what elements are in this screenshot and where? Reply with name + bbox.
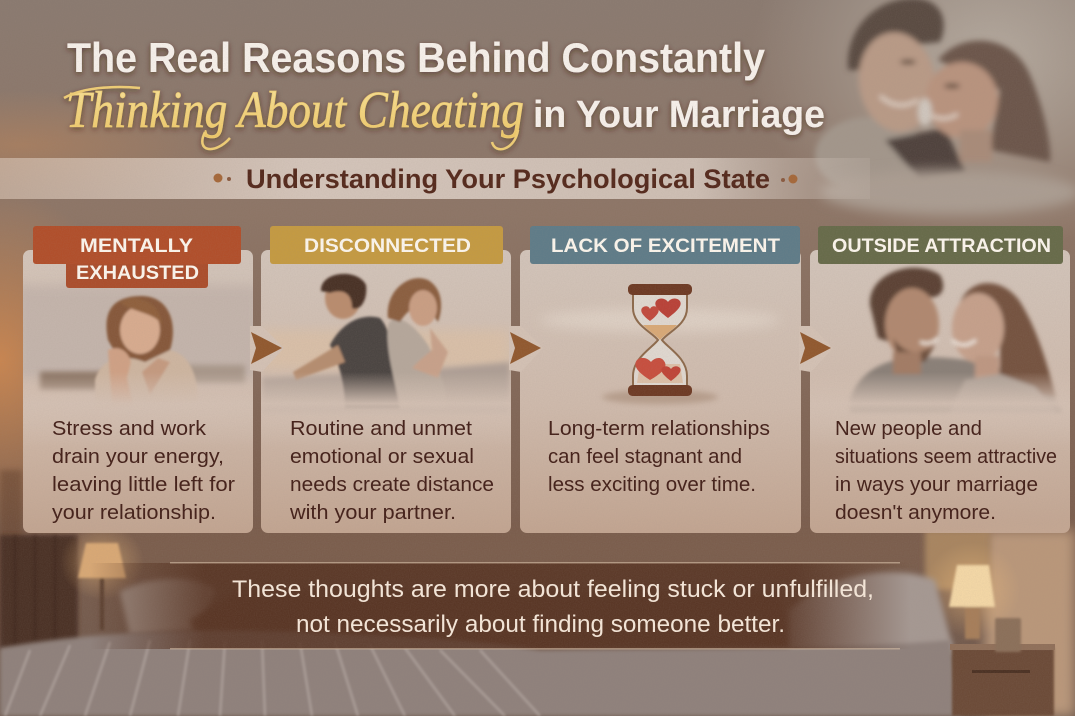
panel: outside attraction [810, 226, 1070, 533]
title highlight: script line: Thinking About Cheating [66, 82, 524, 139]
title: The Real Reasons Behind Constantly [67, 34, 766, 81]
text: card 4: situations seem attractive [835, 445, 1057, 468]
label tab: lack of excitement [530, 226, 800, 264]
label tab: lack of excitement: LACK OF EXCITEMENT [551, 236, 780, 257]
text: card 2: needs create distance [290, 473, 494, 496]
icon: right bedside lamp [949, 565, 1021, 652]
decoration: script flourishes [64, 87, 518, 149]
photo fade [261, 372, 511, 447]
text: card 2: with your partner. [289, 501, 456, 524]
label tab: disconnected: DISCONNECTED [304, 236, 471, 257]
icon: hourglass with hearts [602, 284, 718, 404]
text: card 1: your relationship. [52, 501, 216, 524]
label tab: disconnected [270, 226, 503, 264]
text: card 1: Stress and work [52, 417, 207, 440]
arrow: panel 1 to 2 [250, 326, 284, 372]
text: card 3: less exciting over time. [548, 473, 756, 496]
title [64, 34, 825, 149]
text: card 2: Routine and unmet [290, 417, 472, 440]
decoration: subtitle right bullets [781, 174, 798, 184]
panel: mentally exhausted [15, 226, 260, 533]
heart [635, 358, 665, 380]
label tab: mentally exhausted [33, 226, 241, 288]
text: card 4 [835, 417, 1057, 524]
arrow: panel 3 to 4 [799, 326, 833, 372]
photo: couple back to back [262, 274, 510, 412]
label tab: outside attraction: OUTSIDE ATTRACTION [832, 236, 1051, 257]
decoration: bedding folds [5, 640, 540, 716]
text: card 2: emotional or sexual [290, 445, 474, 468]
text: card 3: can feel stagnant and [548, 445, 742, 468]
photo fade [810, 372, 1070, 447]
heart [641, 306, 659, 321]
text: card 2 [289, 417, 494, 524]
arrow: panel 2 to 3 [509, 326, 543, 372]
subtitle band [0, 158, 870, 199]
subtitle text: Understanding Your Psychological State [246, 164, 770, 194]
photo: tired woman in bed [23, 286, 253, 398]
icon: left bedside lamp [78, 543, 126, 630]
label tab: outside attraction [818, 226, 1063, 264]
photo: couple in header [815, 0, 1050, 193]
text: card 4: New people and [835, 417, 982, 440]
text: card 1 [52, 417, 235, 524]
label tab: mentally exhausted: MENTALLY [80, 236, 193, 257]
photo: smiling couple [850, 268, 1062, 412]
text: card 3 [548, 417, 770, 496]
callout: closing statement [90, 562, 910, 650]
title: in Your Marriage [533, 94, 825, 136]
panel: lack of excitement [520, 226, 801, 533]
heart [655, 299, 681, 318]
callout: closing statement: These thoughts are more about feeling stuck or unfulfilled, [232, 576, 874, 603]
text: card 1: leaving little left for [52, 473, 235, 496]
text: card 3: Long-term relationships [548, 417, 770, 440]
decoration: subtitle left bullets [214, 174, 231, 182]
photo fade [23, 372, 253, 447]
text: card 1: drain your energy, [52, 445, 224, 468]
heart [661, 366, 681, 381]
photo fade: header mist [820, 170, 1075, 214]
label tab: mentally exhausted: EXHAUSTED [76, 263, 199, 284]
text: card 4: in ways your marriage [835, 473, 1038, 496]
callout: closing statement: not necessarily about finding someone better. [296, 611, 785, 638]
text: card 4: doesn't anymore. [835, 501, 996, 524]
panel: disconnected [261, 226, 511, 533]
cloud haze [540, 308, 780, 332]
